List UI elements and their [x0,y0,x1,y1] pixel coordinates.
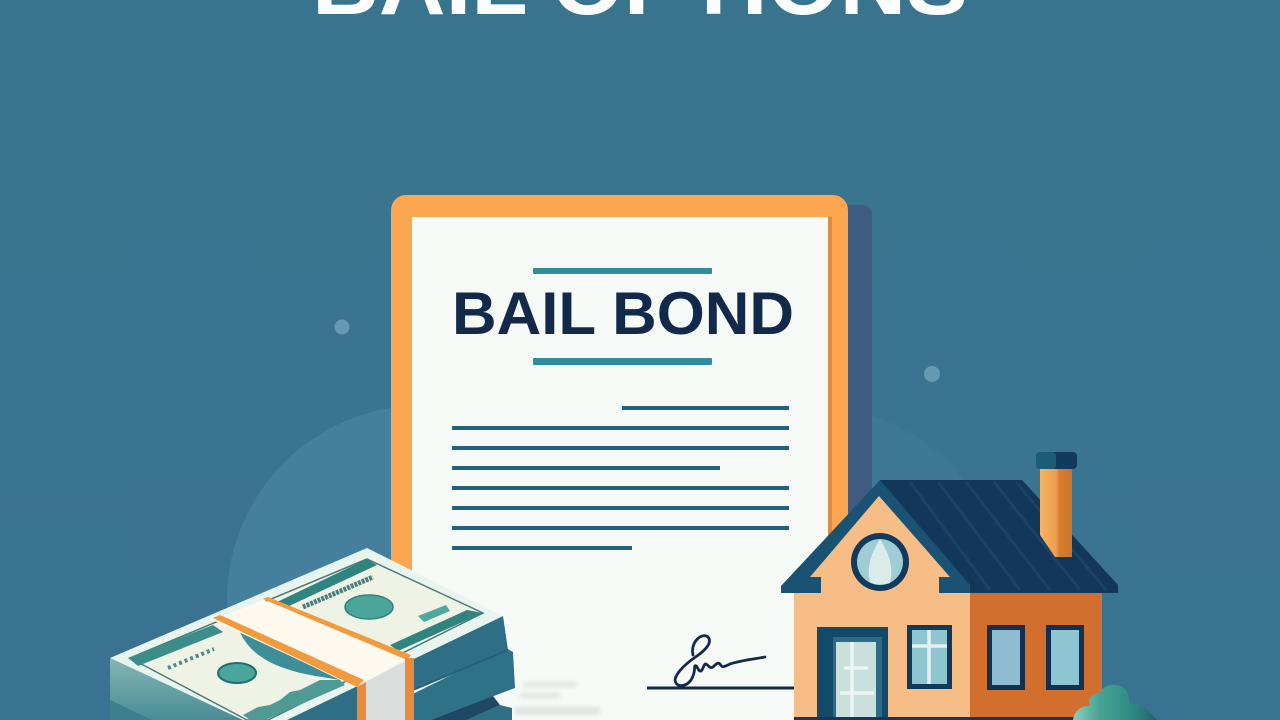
document shadow [838,205,872,625]
door glass [836,642,876,720]
decorative dot right [924,366,940,382]
window glass [1051,630,1079,685]
band side [357,660,413,720]
bottom teal rule [533,358,712,365]
window left [907,625,952,689]
door muntins [840,642,874,720]
round attic window [851,533,909,591]
chimney cap highlight [1036,452,1056,469]
gable peach [810,492,950,600]
stack gap shadow [430,696,500,720]
document paper [412,217,828,720]
window middle [987,625,1025,690]
background glow circle [227,405,617,720]
document frame inner shade [828,217,832,720]
top teal rule [533,268,712,274]
window right [1046,625,1084,690]
top stack side [287,616,508,720]
bill denomination badge [418,605,450,622]
bill center arc [240,632,340,680]
bill center portrait [345,595,393,619]
left stack side [110,658,243,720]
right stack seam [413,650,508,690]
window glass [992,630,1020,685]
gable bargeboard [781,480,970,593]
bill inner face [130,559,483,720]
chimney cap [1036,452,1077,469]
band orange stripe lower [213,615,364,687]
front door [817,627,888,720]
document orange frame [391,195,848,720]
document: bail bond [391,195,872,720]
window frame [907,625,952,689]
door inner frame [833,637,882,720]
bill border left [128,625,223,666]
chimney body [1040,468,1072,557]
paper band [213,600,407,687]
attic window frame [851,533,909,591]
attic window glass [857,539,903,585]
bill border lower right [390,610,483,651]
house [781,452,1118,720]
document text lines [452,406,789,550]
bill left seal [218,663,256,683]
window frame [987,625,1025,690]
door frame [817,627,888,720]
third stack layer [467,705,512,720]
document heading: BAIL BOND [452,280,794,347]
band side orange right [405,658,414,720]
band side orange left [357,682,366,720]
signature [647,636,794,688]
roof right slope [880,480,1118,593]
house left wall [794,590,971,720]
band orange stripe upper [263,597,411,660]
top bill paper [110,548,503,720]
house base line [794,717,1104,720]
decorative dot left [334,320,350,334]
cash stack [110,548,515,720]
window frame [1046,625,1084,690]
bill border upper right [277,559,377,607]
chimney [1036,452,1077,557]
second stack layer [360,648,515,720]
left stack lower layer [110,700,152,720]
bush [1073,685,1157,720]
roof ribs [910,482,1106,590]
house right wall [970,590,1102,720]
paper soft shadow [515,682,600,715]
bill serial number [168,649,214,668]
window muntins [912,630,947,684]
bill bottom scallops [243,680,345,720]
attic window highlight [869,539,891,584]
bill print lines [303,577,373,607]
window glass [912,630,947,684]
background glow hill [615,405,1005,720]
